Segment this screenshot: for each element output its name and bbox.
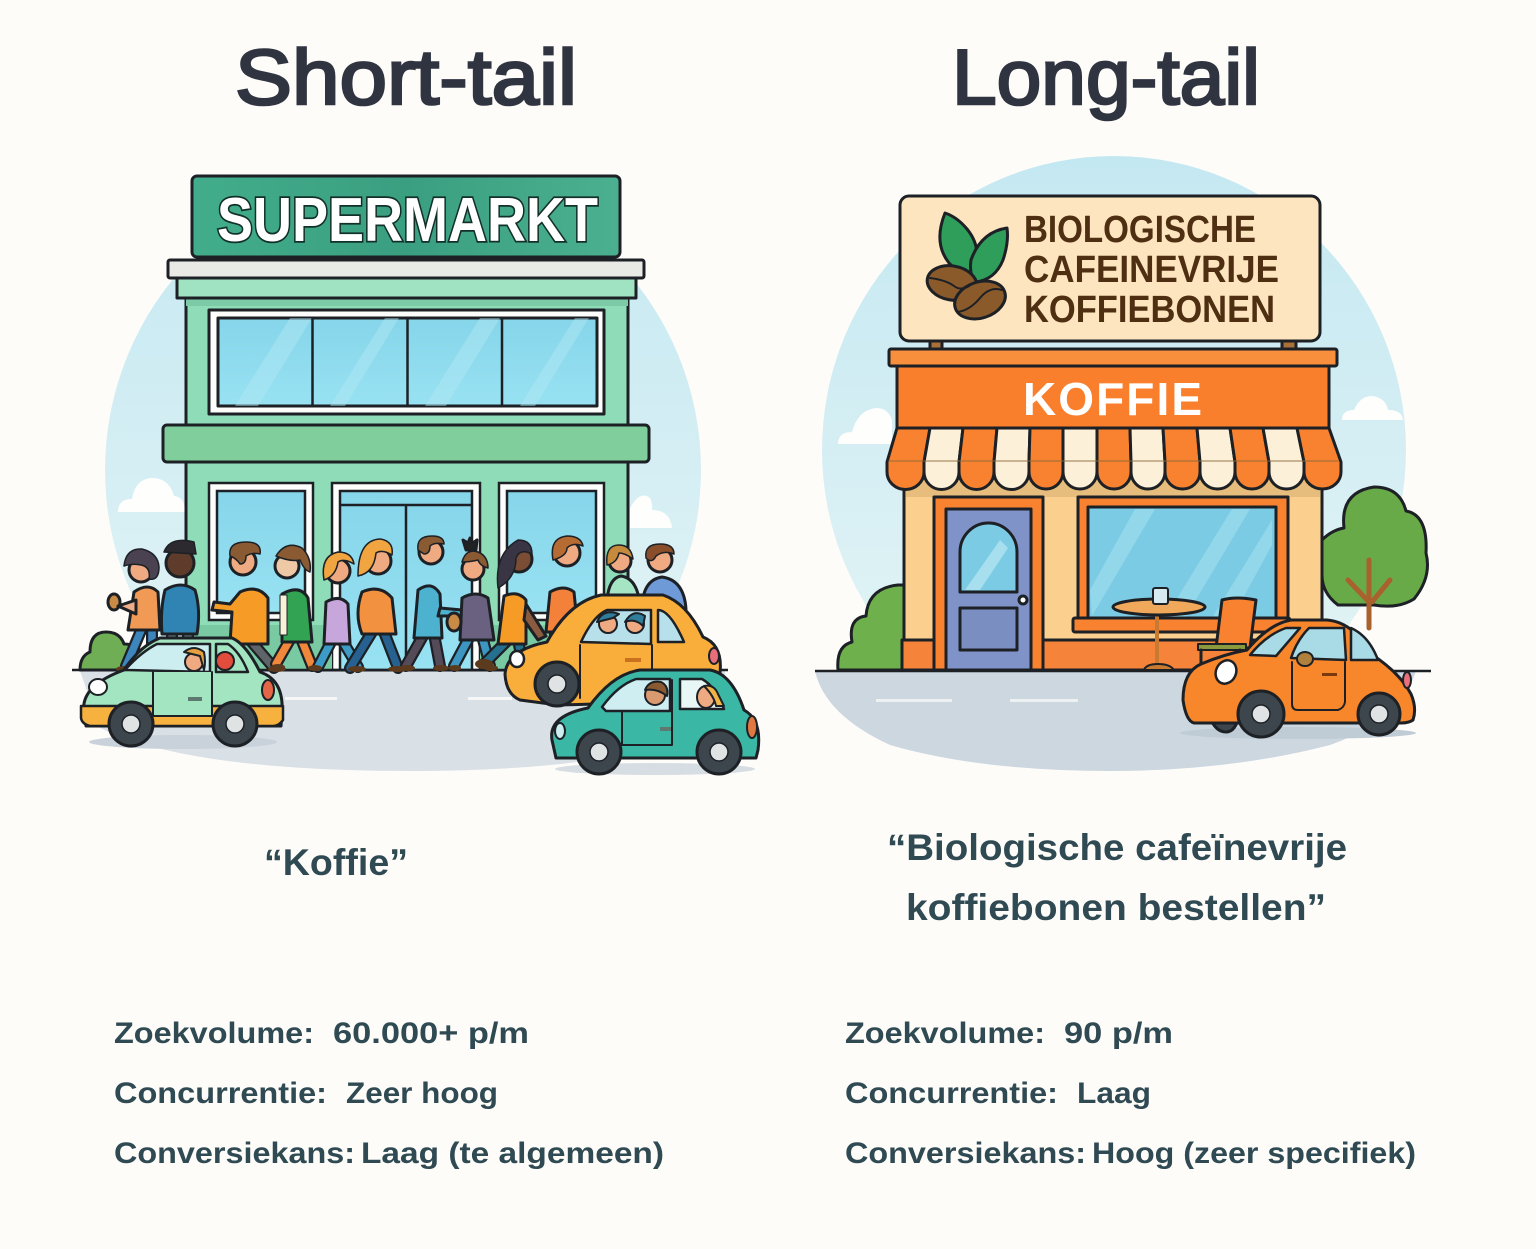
person 4 (275, 545, 312, 666)
zoekvolume (845, 1017, 1173, 1050)
conversiekans: Conversiekans: (845, 1137, 1086, 1170)
zoekvolume (114, 1017, 529, 1050)
person 5 (318, 552, 358, 667)
sky circle (822, 156, 1406, 744)
concurrentie: Zeer hoog (346, 1077, 498, 1110)
cornice (889, 349, 1337, 366)
conversiekans: Hoog (zeer specifiek) (1092, 1137, 1416, 1170)
left bush (838, 585, 904, 670)
coffee sign (900, 196, 1320, 341)
wall shadow strip (186, 298, 628, 306)
infographic: short-tail versus long-tail (72, 46, 1431, 1169)
icon: coffee beans and leaves (924, 213, 1010, 325)
concurrentie (114, 1077, 498, 1110)
sign posts (930, 339, 1296, 349)
entrance doors (332, 483, 480, 670)
shoes (116, 659, 498, 672)
person 2 (161, 540, 199, 650)
green car (81, 638, 283, 749)
wall (186, 298, 628, 670)
base (186, 625, 628, 670)
keyword: Biologische cafeïnevrije koffiebonen bestellen: koffiebonen bestellen” (906, 887, 1326, 928)
person 8 (447, 538, 494, 666)
concurrentie: Concurrentie: (114, 1077, 327, 1110)
KOFFIE fascia (897, 366, 1329, 428)
person 10 (546, 536, 583, 650)
yellow car (505, 595, 720, 706)
heading: Long-tail: Long-tail (952, 33, 1260, 121)
person 3 (212, 542, 274, 668)
teal car (552, 670, 759, 775)
sign text: KOFFIEBONEN (1024, 289, 1275, 331)
road markings (876, 699, 1078, 702)
shadow green car (89, 735, 277, 749)
lower left window (209, 483, 313, 620)
person 1 (108, 549, 160, 666)
shop window (1078, 497, 1288, 625)
crowd of shoppers (108, 536, 686, 672)
zoekvolume: Zoekvolume: (845, 1017, 1045, 1050)
person 11 (607, 545, 639, 600)
coffee shop building (887, 196, 1341, 670)
concurrentie: Concurrentie: (845, 1077, 1058, 1110)
shadow teal car (555, 763, 755, 775)
clouds (118, 478, 672, 528)
conversiekans: Conversiekans: (114, 1137, 355, 1170)
passengers yellow car (597, 612, 645, 633)
SUPERMARKT sign: SUPERMARKT (217, 186, 598, 255)
stats: short-tail (114, 1017, 664, 1170)
clouds (838, 396, 1403, 444)
ground line (72, 669, 728, 671)
roof slab (168, 260, 644, 278)
road (80, 671, 725, 771)
base (902, 640, 1322, 670)
zoekvolume: 90 p/m (1064, 1017, 1173, 1050)
awning (887, 428, 1341, 490)
conversiekans (845, 1137, 1416, 1170)
road (815, 671, 1416, 771)
roof fascia (177, 276, 636, 298)
sky circle (105, 280, 701, 638)
person 9 (484, 540, 546, 664)
window sill (1073, 618, 1290, 632)
keyword: Koffie: “Koffie” (264, 842, 408, 883)
person 6 (350, 539, 398, 668)
concurrentie (845, 1077, 1151, 1110)
sign text (1024, 209, 1279, 331)
green band (163, 425, 649, 462)
cafe table (1113, 588, 1205, 670)
panel: supermarket scene (72, 170, 759, 775)
upper window (209, 310, 604, 414)
road markings (285, 697, 512, 700)
keyword: Biologische cafeïnevrije koffiebonen bestellen: “Biologische cafeïnevrije (887, 827, 1347, 868)
supermarket building (163, 260, 649, 670)
shadow orange car (1180, 727, 1416, 739)
conversiekans (114, 1137, 664, 1170)
keyword: Biologische cafeïnevrije koffiebonen bestellen (887, 827, 1347, 928)
heading: Short-tail: Short-tail (235, 33, 577, 121)
door (934, 497, 1043, 670)
driver green car (184, 648, 205, 671)
zoekvolume: Zoekvolume: (114, 1017, 314, 1050)
stats: long-tail (845, 1017, 1416, 1170)
lower right window (499, 483, 604, 620)
conversiekans: Laag (te algemeen) (361, 1137, 664, 1170)
cafe chair (1198, 598, 1256, 670)
passengers teal car (645, 682, 724, 708)
ground line (815, 670, 1431, 672)
orange car (1180, 620, 1416, 739)
person 12 (642, 544, 686, 610)
sign text: CAFEINEVRIJE (1024, 249, 1279, 291)
zoekvolume: 60.000+ p/m (333, 1017, 529, 1050)
concurrentie: Laag (1077, 1077, 1151, 1110)
wall shadow (906, 480, 1320, 497)
tree (1322, 487, 1428, 628)
wall (904, 486, 1322, 670)
bush (80, 632, 149, 670)
person 7 (406, 536, 462, 666)
sign text: BIOLOGISCHE (1024, 209, 1256, 251)
panel: coffee shop scene (815, 156, 1431, 771)
KOFFIE fascia: KOFFIE (1023, 373, 1202, 425)
